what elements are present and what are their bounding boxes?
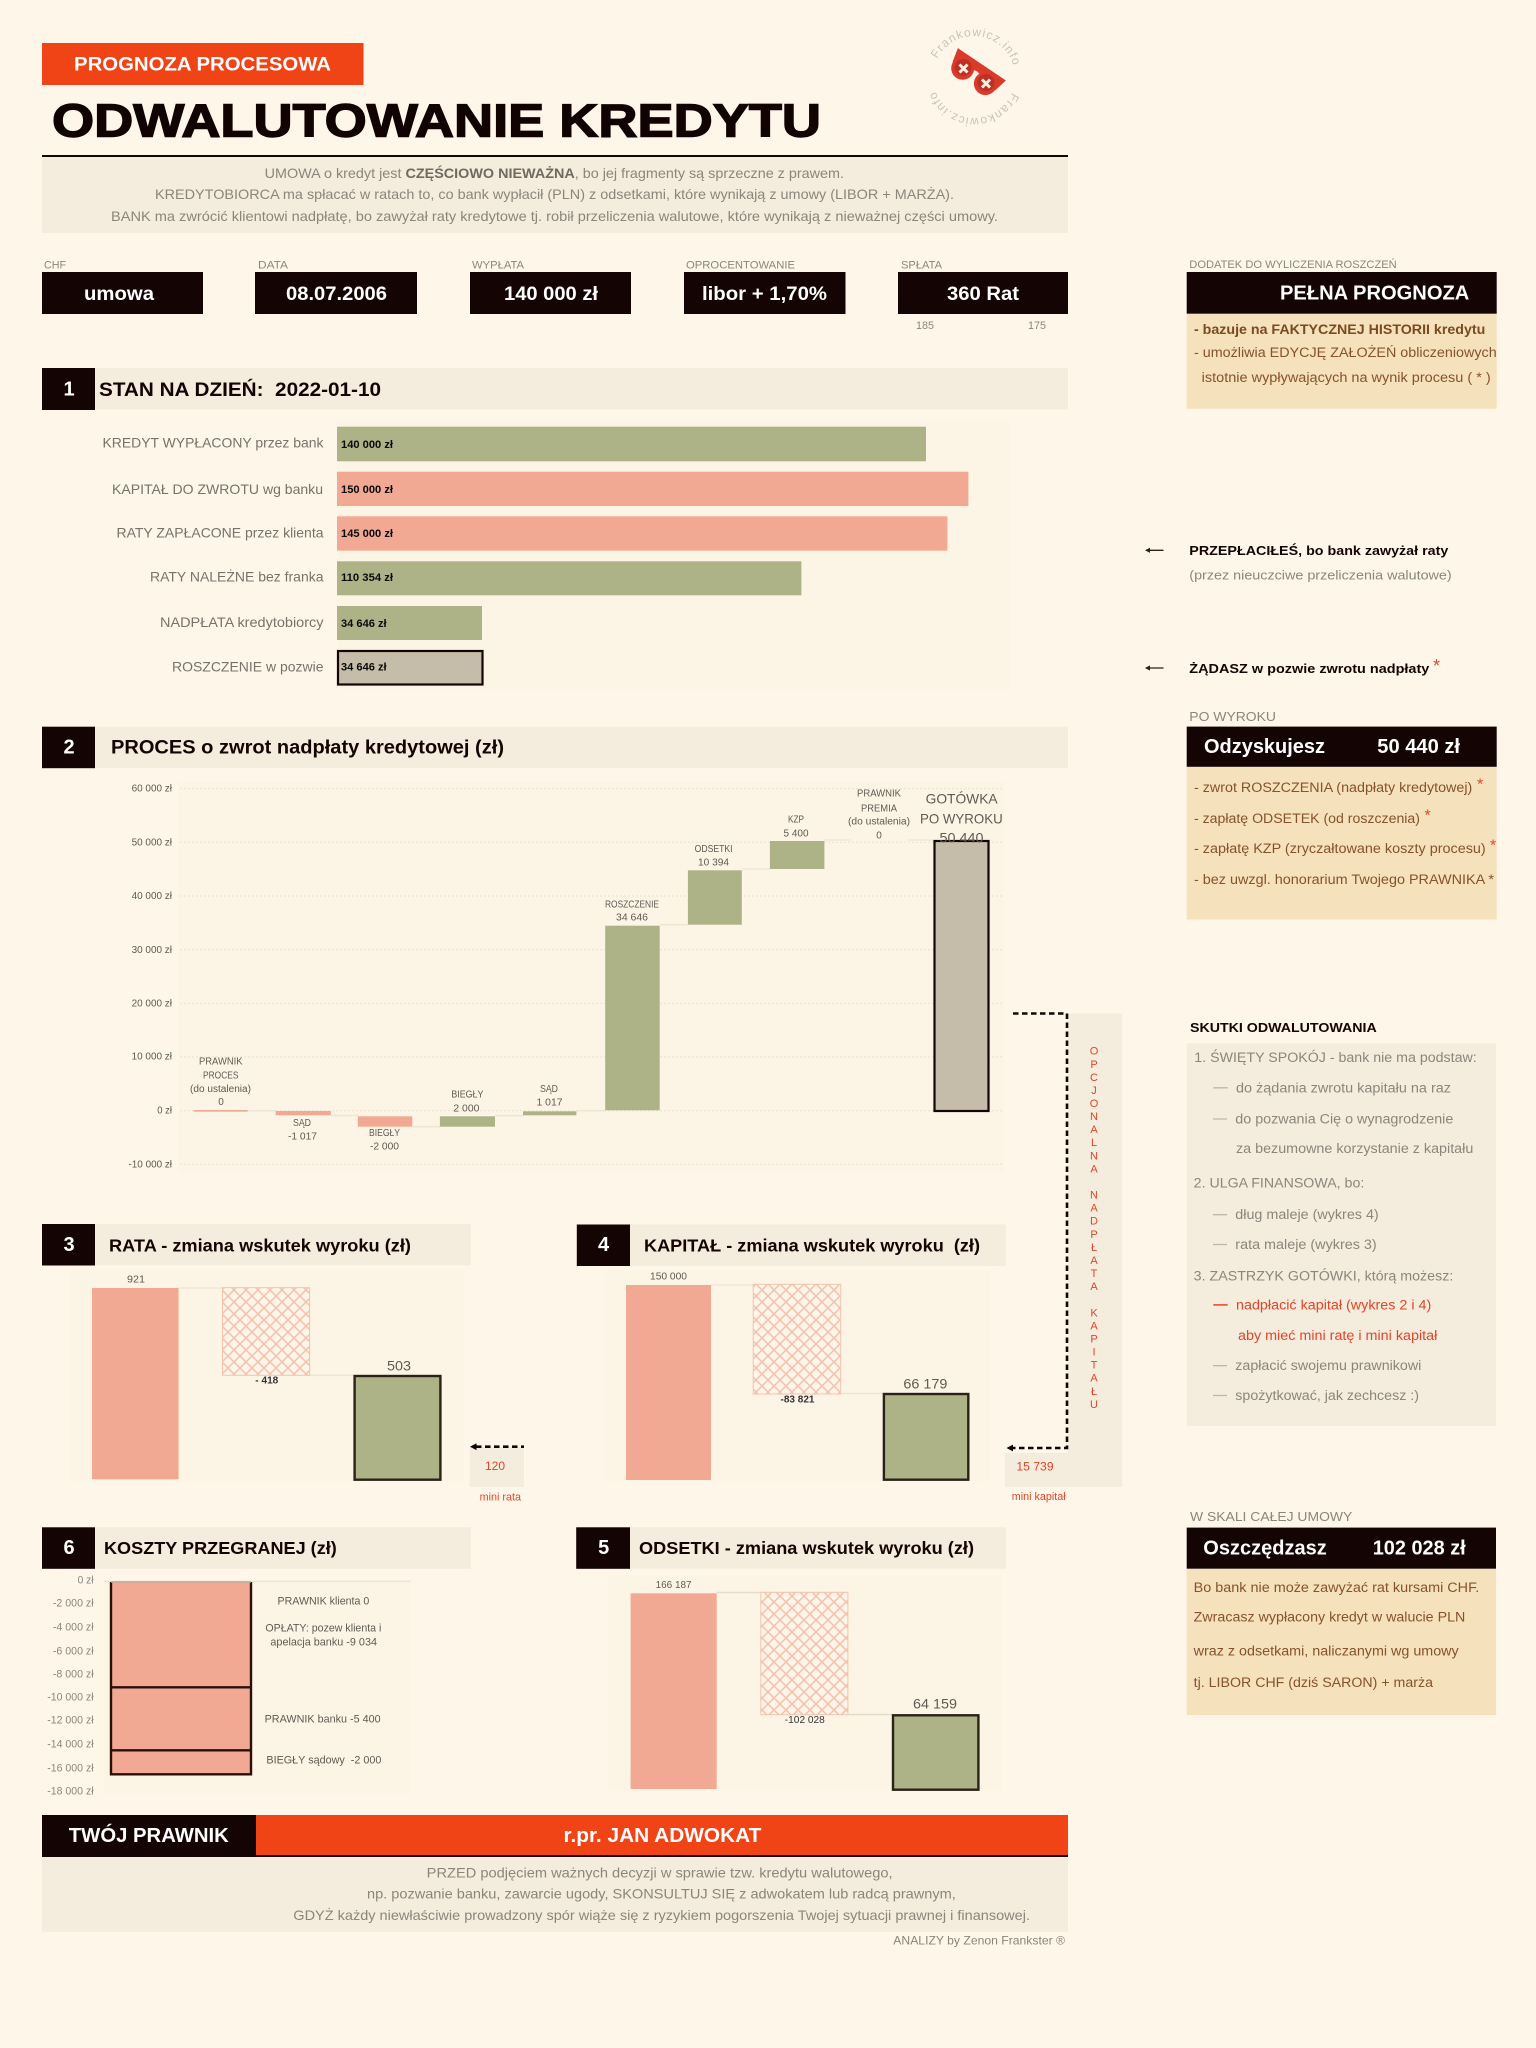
panel: skutki odwalutowania: zapłacić swojemu prawnikowi — [1235, 1358, 1421, 1373]
label: prawnik proces: 0 — [218, 1097, 224, 1108]
chart: koszty przegranej: -10 000 zł — [47, 1692, 94, 1704]
banner: prognoza procesowa — [42, 43, 364, 85]
section 2 heading — [42, 727, 1068, 768]
waterfall chart: proces: 50 000 zł — [132, 838, 173, 849]
info box: data: 08.07.2006 — [286, 284, 387, 305]
panel: w skali całej umowy oszczędzasz: tj. LIBOR CHF (dziś SARON) + marża — [1194, 1675, 1434, 1690]
panel: po wyroku odzyskujesz: Odzyskujesz — [1204, 736, 1325, 758]
panel: po wyroku odzyskujesz: * — [1490, 838, 1496, 854]
label: kzp: KZP — [788, 814, 804, 826]
panel: skutki odwalutowania: rata maleje (wykres 3) — [1235, 1237, 1377, 1252]
panel: w skali całej umowy oszczędzasz: Oszczędzasz — [1203, 1537, 1327, 1559]
chart: rata: 503 — [387, 1358, 411, 1374]
label: kzp — [784, 814, 809, 840]
annotation: żądasz — [1145, 656, 1440, 676]
annotation: żądasz: ŻĄDASZ w pozwie zwrotu nadpłaty — [1189, 661, 1430, 676]
panel: dodatek pełna prognoza: - bazuje na FAKTYCZNEJ HISTORII kredytu — [1194, 322, 1485, 337]
intro panel — [42, 155, 1068, 233]
label: biegły minus: -2 000 — [370, 1142, 399, 1153]
label: biegły plus: BIEGŁY — [451, 1090, 484, 1100]
waterfall chart: proces — [128, 782, 1004, 1172]
chart: rata: 921 — [127, 1274, 145, 1286]
chart: odsetki: 64 159 — [913, 1695, 957, 1711]
info box: CHF umowa: CHF — [44, 260, 66, 272]
bar chart: stan na dzień — [102, 421, 1010, 689]
chart: rata: - 418 — [255, 1376, 279, 1386]
info box: spłata — [898, 260, 1068, 332]
panel: skutki odwalutowania: do żądania zwrotu kapitału na raz — [1236, 1080, 1451, 1095]
section 5 heading — [576, 1527, 1006, 1569]
info box: wypłata: 140 000 zł — [504, 284, 599, 305]
chart: koszty przegranej: PRAWNIK klienta 0 — [278, 1596, 369, 1608]
label: sąd plus: 1 017 — [536, 1098, 563, 1108]
intro panel: BANK ma zwrócić klientowi nadpłatę, bo zawyżał raty kredytowe tj. robił przeliczenia walutowe, które wynikają z nieważnej części umowy. — [111, 208, 998, 224]
info box: spłata: SPŁATA — [901, 260, 943, 272]
panel: dodatek pełna prognoza: - umożliwia EDYCJĘ ZAŁOŻEŃ obliczeniowych — [1194, 345, 1497, 360]
chart: kapitał: -83 821 — [780, 1394, 815, 1406]
row: raty zapłacone: RATY ZAPŁACONE przez klienta — [116, 525, 324, 541]
chart: koszty przegranej: 0 zł — [78, 1575, 94, 1587]
label: prawnik premia: PREMIA — [861, 804, 897, 814]
panel: w skali całej umowy oszczędzasz: Bo bank nie może zawyżać rat kursami CHF. — [1194, 1580, 1479, 1595]
footer disclaimer: GDYŻ każdy niewłaściwie prowadzony spór wiąże się z ryzykiem pogorszenia Twojej sytuacji prawnej i finansowej. — [293, 1906, 1030, 1923]
label: prawnik proces: (do ustalenia) — [190, 1084, 251, 1095]
panel: skutki odwalutowania: do pozwania Cię o wynagrodzenie — [1235, 1112, 1453, 1126]
panel: w skali całej umowy oszczędzasz: W SKALI CAŁEJ UMOWY — [1190, 1509, 1353, 1524]
footer bar: twój prawnik: TWÓJ PRAWNIK — [69, 1823, 229, 1847]
label: odsetki: 10 394 — [698, 858, 729, 868]
section 3 heading: 3 — [63, 1234, 75, 1256]
chart: koszty przegranej: -14 000 zł — [47, 1739, 94, 1751]
row: kredyt wypłacony: KREDYT WYPŁACONY przez bank — [102, 435, 324, 451]
chart: kapitał — [605, 1270, 990, 1481]
panel: w skali całej umowy oszczędzasz: Zwracasz wypłacony kredyt w walucie PLN — [1194, 1609, 1465, 1624]
row: roszczenie — [172, 651, 482, 684]
label: sąd minus: SĄD — [293, 1118, 311, 1129]
panel: skutki odwalutowania: 3. ZASTRZYK GOTÓWKI, którą możesz: — [1194, 1268, 1453, 1284]
label: prawnik premia — [848, 788, 910, 842]
waterfall chart: proces: 60 000 zł — [132, 783, 173, 794]
row: raty zapłacone — [116, 516, 947, 551]
panel: skutki odwalutowania — [1187, 1020, 1496, 1426]
section 3 heading — [42, 1224, 471, 1266]
section 1 heading: STAN NA DZIEŃ: 2022-01-10 — [99, 379, 381, 401]
info box: wypłata: WYPŁATA — [472, 260, 525, 272]
chart: odsetki: -102 028 — [785, 1715, 825, 1726]
row: kredyt wypłacony — [102, 427, 926, 461]
panel: opcjonalna nadpłata kapitału: 15 739 — [1016, 1460, 1054, 1474]
label: prawnik proces — [190, 1056, 251, 1108]
row: nadpłata: 34 646 zł — [341, 618, 387, 630]
info box: oprocentowanie: libor + 1,70% — [702, 284, 827, 305]
panel: skutki odwalutowania: za bezumowne korzystanie z kapitału — [1236, 1141, 1473, 1156]
panel: po wyroku odzyskujesz: - zwrot ROSZCZENIA (nadpłaty kredytowej) — [1194, 780, 1472, 795]
label: gotówka po wyroku: PO WYROKU — [920, 811, 1003, 827]
chart: koszty przegranej: PRAWNIK banku -5 400 — [265, 1713, 381, 1725]
label: gotówka po wyroku: 50 440 — [940, 829, 984, 845]
panel: mini rata: 120 — [485, 1459, 505, 1473]
row: raty należne — [150, 561, 801, 595]
label: gotówka po wyroku: GOTÓWKA — [926, 790, 998, 806]
waterfall chart: proces: -10 000 zł — [128, 1159, 173, 1170]
chart: koszty przegranej: BIEGŁY sądowy -2 000 — [266, 1755, 381, 1767]
panel: po wyroku odzyskujesz: - bez uwzgl. honorarium Twojego PRAWNIKA * — [1194, 872, 1495, 887]
row: kapitał do zwrotu: KAPITAŁ DO ZWROTU wg banku — [112, 481, 323, 497]
intro panel: KREDYTOBIORCA ma spłacać w ratach to, co bank wypłacił (PLN) z odsetkami, które wynikają z umowy (LIBOR + MARŻA). — [155, 185, 954, 202]
waterfall chart: proces: 20 000 zł — [132, 998, 173, 1009]
section 5 heading: 5 — [598, 1537, 609, 1559]
annotation: przepłaciłeś: PRZEPŁACIŁEŚ, bo bank zawyżał raty — [1189, 543, 1449, 558]
info box: oprocentowanie: OPROCENTOWANIE — [686, 260, 795, 272]
row: raty zapłacone: 145 000 zł — [341, 528, 393, 540]
section 6 heading: 6 — [63, 1537, 75, 1559]
section 6 heading — [42, 1527, 471, 1569]
section 4 heading: KAPITAŁ - zmiana wskutek wyroku (zł) — [644, 1236, 980, 1256]
info box: spłata: 185 — [916, 320, 934, 332]
label: gotówka po wyroku — [920, 790, 1003, 845]
info box: CHF umowa — [42, 260, 203, 314]
panel: opcjonalna nadpłata kapitału — [1005, 1014, 1122, 1503]
chart: kapitał: 66 179 — [903, 1376, 948, 1392]
label: biegły minus: BIEGŁY — [369, 1128, 400, 1139]
label: prawnik proces: PRAWNIK — [199, 1056, 243, 1068]
chart: koszty przegranej — [47, 1575, 411, 1798]
row: kredyt wypłacony: 140 000 zł — [341, 439, 393, 451]
banner: prognoza procesowa: PROGNOZA PROCESOWA — [74, 54, 331, 76]
annotation: przepłaciłeś: (przez nieuczciwe przeliczenia walutowe) — [1189, 567, 1452, 582]
panel: opcjonalna nadpłata kapitału: KAPITAŁU — [1090, 1307, 1098, 1411]
info box: spłata: 175 — [1028, 320, 1046, 332]
panel: opcjonalna nadpłata kapitału: OPCJONALNA — [1090, 1046, 1099, 1175]
chart: odsetki — [608, 1575, 1002, 1791]
chart: koszty przegranej: -2 000 zł — [53, 1598, 94, 1610]
panel: po wyroku odzyskujesz: - zapłatę KZP (zryczałtowane koszty procesu) — [1194, 841, 1486, 856]
chart: koszty przegranej: OPŁATY: pozew klienta i — [265, 1623, 381, 1635]
waterfall chart: proces: 10 000 zł — [132, 1052, 173, 1063]
panel: dodatek pełna prognoza: PEŁNA PROGNOZA — [1280, 283, 1469, 305]
panel: dodatek pełna prognoza: DODATEK DO WYLICZENIA ROSZCZEŃ — [1189, 258, 1397, 271]
chart: rata — [70, 1270, 464, 1481]
intro panel: UMOWA o kredyt jest CZĘŚCIOWO NIEWAŻNA , bo jej fragmenty są sprzeczne z prawem. — [265, 164, 844, 181]
panel: skutki odwalutowania: spożytkować, jak zechcesz :) — [1235, 1388, 1419, 1403]
chart: koszty przegranej: -4 000 zł — [53, 1622, 94, 1634]
label: prawnik premia: 0 — [876, 830, 882, 842]
section 4 heading: 4 — [598, 1234, 610, 1256]
credit: ANALIZY by Zenon Frankster ® — [893, 1934, 1065, 1948]
logo: frankowicz.info: Frankowicz.info — [930, 92, 1019, 126]
row: raty należne: RATY NALEŻNE bez franka — [150, 568, 324, 585]
logo: frankowicz.info — [930, 28, 1019, 126]
panel: po wyroku odzyskujesz: 50 440 zł — [1377, 736, 1460, 758]
label: roszczenie: 34 646 — [616, 912, 648, 924]
chart: koszty przegranej: -18 000 zł — [47, 1786, 94, 1798]
row: kapitał do zwrotu — [112, 472, 968, 506]
panel: dodatek pełna prognoza: istotnie wypływających na wynik procesu ( * ) — [1202, 370, 1491, 385]
panel: po wyroku odzyskujesz: * — [1424, 808, 1431, 824]
section 5 heading: ODSETKI - zmiana wskutek wyroku (zł) — [639, 1538, 974, 1558]
panel: po wyroku odzyskujesz — [1187, 709, 1497, 920]
label: prawnik premia: PRAWNIK — [857, 788, 901, 800]
info box: data — [255, 260, 417, 314]
arrow: dashed from chart 2 to chart 4 — [1006, 1014, 1067, 1451]
annotation: żądasz: * — [1433, 656, 1440, 676]
label: prawnik premia: (do ustalenia) — [848, 816, 910, 828]
annotation: przepłaciłeś — [1145, 543, 1452, 582]
waterfall chart: proces: 0 zł — [157, 1106, 173, 1117]
chart: koszty przegranej: -6 000 zł — [53, 1646, 94, 1658]
waterfall chart: proces: 40 000 zł — [132, 891, 173, 902]
label: odsetki: ODSETKI — [695, 844, 733, 855]
panel: po wyroku odzyskujesz: PO WYROKU — [1189, 709, 1276, 724]
panel: opcjonalna nadpłata kapitału: mini kapitał — [1012, 1491, 1066, 1503]
chart: odsetki: 166 187 — [656, 1580, 692, 1591]
footer bar: twój prawnik: r.pr. JAN ADWOKAT — [564, 1825, 761, 1847]
section 2 heading: 2 — [63, 736, 75, 758]
panel: skutki odwalutowania: 2. ULGA FINANSOWA, bo: — [1194, 1176, 1364, 1190]
panel: skutki odwalutowania: aby mieć mini ratę i mini kapitał — [1238, 1328, 1437, 1343]
logo: frankowicz.info: Frankowicz.info — [930, 28, 1018, 64]
label: prawnik proces: PROCES — [203, 1070, 239, 1082]
info box: data: DATA — [258, 260, 289, 272]
chart: koszty przegranej: -12 000 zł — [47, 1715, 94, 1727]
section 3 heading: RATA - zmiana wskutek wyroku (zł) — [109, 1236, 411, 1256]
footer bar: twój prawnik — [42, 1815, 1068, 1857]
section 4 heading — [577, 1224, 1006, 1266]
label: kzp: 5 400 — [784, 828, 809, 840]
label: sąd minus: -1 017 — [288, 1132, 317, 1142]
panel: mini rata: mini rata — [480, 1492, 522, 1504]
footer disclaimer: np. pozwanie banku, zawarcie ugody, SKONSULTUJ SIĘ z adwokatem lub radcą prawnym, — [367, 1885, 956, 1901]
panel: mini rata — [470, 1443, 524, 1504]
chart: koszty przegranej: -8 000 zł — [53, 1669, 94, 1681]
row: roszczenie: 34 646 zł — [341, 662, 387, 674]
info box: CHF umowa: umowa — [84, 284, 154, 305]
label: biegły plus: 2 000 — [453, 1104, 480, 1114]
label: roszczenie: ROSZCZENIE — [605, 900, 659, 910]
section 1 heading: 1 — [63, 378, 75, 400]
panel: dodatek pełna prognoza — [1187, 258, 1497, 409]
panel: skutki odwalutowania: dług maleje (wykres 4) — [1235, 1207, 1379, 1222]
panel: po wyroku odzyskujesz: * — [1477, 776, 1483, 794]
panel: skutki odwalutowania: SKUTKI ODWALUTOWANIA — [1190, 1020, 1377, 1035]
title: ODWALUTOWANIE KREDYTU — [52, 94, 821, 146]
label: roszczenie — [605, 900, 659, 924]
panel: w skali całej umowy oszczędzasz: 102 028 zł — [1373, 1537, 1466, 1559]
label: biegły plus — [451, 1090, 484, 1114]
row: nadpłata: NADPŁATA kredytobiorcy — [160, 614, 324, 630]
chart: koszty przegranej: -16 000 zł — [47, 1763, 94, 1775]
panel: skutki odwalutowania: 1. ŚWIĘTY SPOKÓJ - bank nie ma podstaw: — [1194, 1050, 1477, 1065]
chart: kapitał: 150 000 — [650, 1272, 687, 1282]
chart: koszty przegranej: apelacja banku -9 034 — [270, 1637, 377, 1649]
row: kapitał do zwrotu: 150 000 zł — [341, 484, 393, 496]
footer disclaimer — [42, 1857, 1068, 1932]
label: sąd plus — [536, 1084, 563, 1108]
waterfall chart: proces: 30 000 zł — [132, 945, 173, 956]
row: roszczenie: ROSZCZENIE w pozwie — [172, 659, 324, 675]
info box: spłata: 360 Rat — [947, 284, 1020, 305]
info box: wypłata — [470, 260, 631, 314]
label: sąd plus: SĄD — [540, 1084, 558, 1095]
section 2 heading: PROCES o zwrot nadpłaty kredytowej (zł) — [111, 738, 504, 759]
row: nadpłata — [160, 606, 482, 640]
section 1 heading — [42, 368, 1068, 410]
panel: opcjonalna nadpłata kapitału: NADPŁATA — [1090, 1190, 1098, 1293]
row: raty należne: 110 354 zł — [341, 572, 393, 584]
panel: w skali całej umowy oszczędzasz — [1187, 1509, 1496, 1715]
footer disclaimer: PRZED podjęciem ważnych decyzji w sprawie tzw. kredytu walutowego, — [427, 1864, 893, 1880]
info box: oprocentowanie — [684, 260, 846, 314]
section 6 heading: KOSZTY PRZEGRANEJ (zł) — [104, 1538, 337, 1558]
panel: w skali całej umowy oszczędzasz: wraz z odsetkami, naliczanymi wg umowy — [1193, 1643, 1459, 1658]
label: odsetki — [695, 844, 733, 868]
label: sąd minus — [288, 1118, 317, 1142]
panel: skutki odwalutowania: nadpłacić kapitał (wykres 2 i 4) — [1236, 1297, 1431, 1312]
label: biegły minus — [369, 1128, 400, 1153]
panel: po wyroku odzyskujesz: - zapłatę ODSETEK (od roszczenia) — [1194, 811, 1420, 826]
